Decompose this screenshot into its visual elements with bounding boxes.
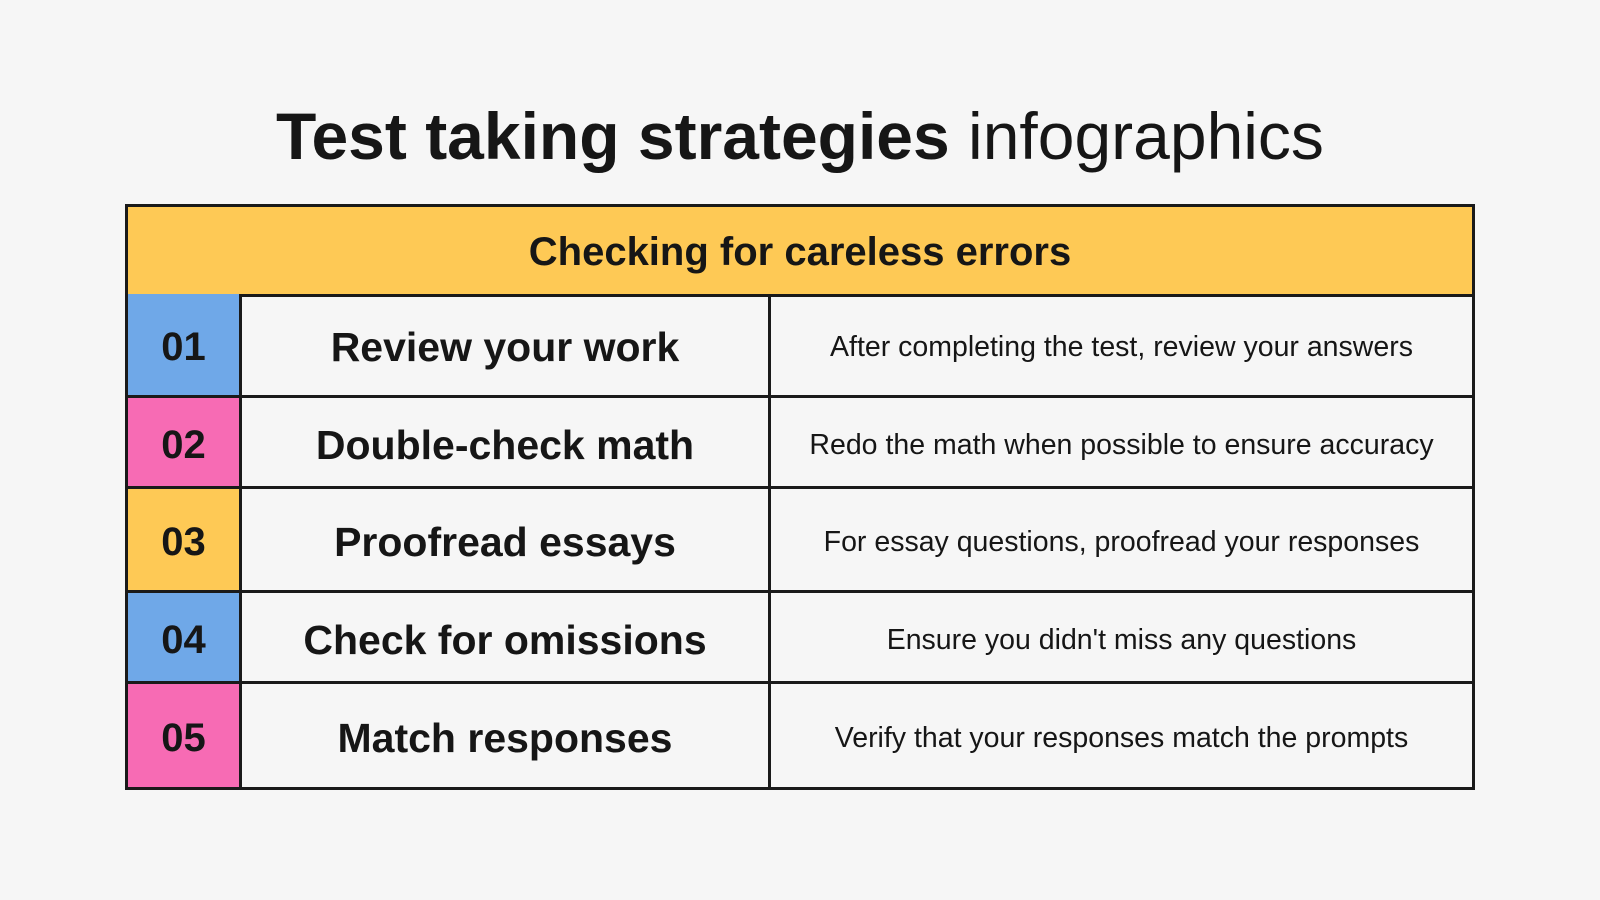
row 04	[128, 593, 1472, 684]
table: Verify that your responses match the prompts	[835, 722, 1408, 754]
table: Redo the math when possible to ensure accuracy	[809, 428, 1434, 460]
table: 04	[161, 618, 206, 662]
row 02	[128, 398, 1472, 489]
table: 02	[161, 422, 206, 466]
table header: Checking for careless errors	[529, 230, 1071, 274]
table	[125, 204, 1475, 790]
title: Test taking strategies infographics	[276, 99, 1324, 173]
row 01	[128, 294, 1472, 398]
row 03	[128, 489, 1472, 593]
table: For essay questions, proofread your responses	[824, 526, 1419, 558]
table: 03	[161, 520, 206, 564]
table: After completing the test, review your answers	[830, 331, 1413, 363]
table: Proofread essays	[334, 519, 676, 565]
table: Review your work	[331, 324, 679, 370]
row 05	[128, 684, 1408, 787]
table: Match responses	[338, 715, 672, 761]
table: 05	[161, 716, 206, 760]
table: Double-check math	[316, 422, 694, 468]
table header	[128, 207, 1472, 297]
table: Check for omissions	[303, 616, 707, 662]
table: Ensure you didn't miss any questions	[887, 624, 1356, 656]
table: 01	[161, 325, 206, 369]
